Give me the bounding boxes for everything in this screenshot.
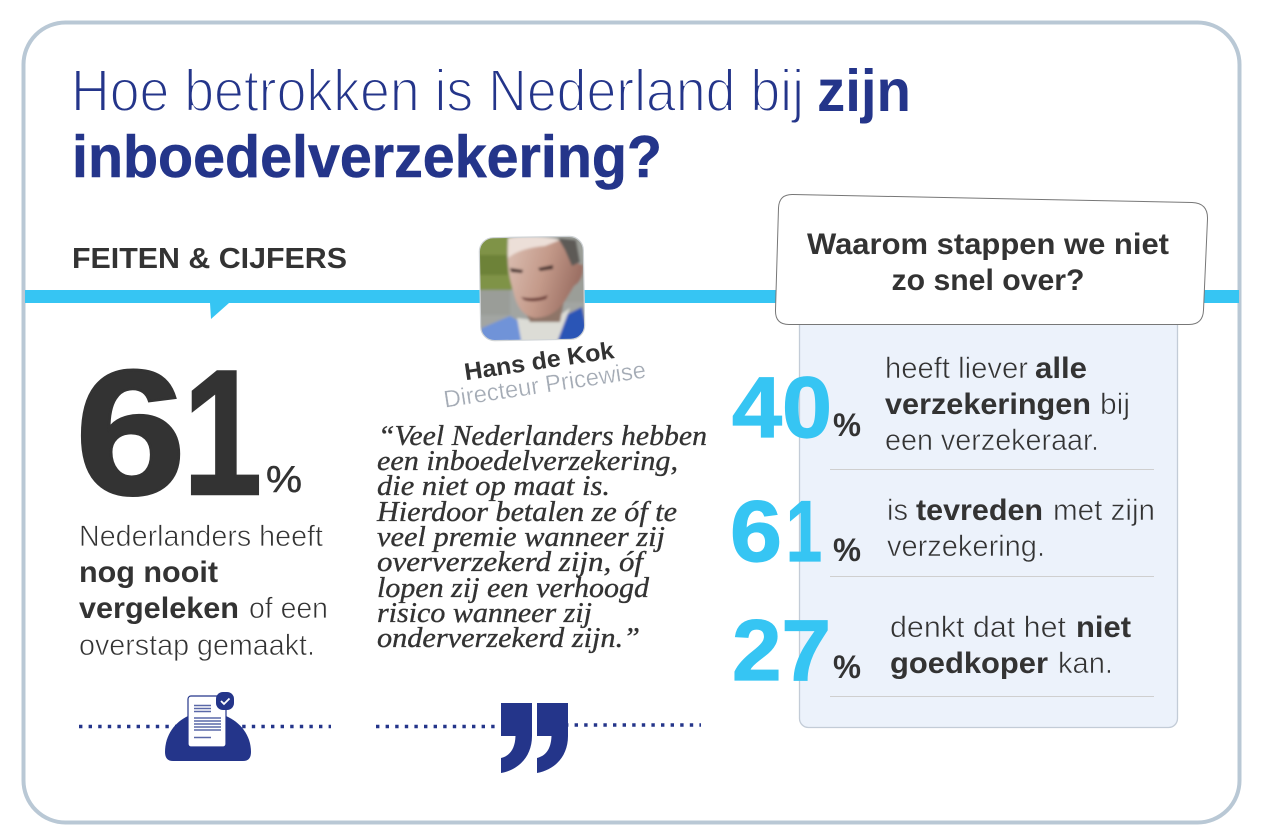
- caption: name and role: Hans de Kok: [463, 337, 617, 386]
- text block: nederlanders: Nederlanders heeft: [79, 520, 324, 553]
- callout: waarom stappen we niet: [775, 194, 1208, 324]
- stat row: 40 percent: een verzekeraar.: [885, 424, 1099, 457]
- stat row: 40 percent: 40: [732, 360, 832, 456]
- caption: name and role: [438, 333, 648, 414]
- quote text: risico wanneer zij: [377, 597, 592, 629]
- portrait photo: Hans de Kok: [478, 236, 586, 342]
- stat row: 61 percent: tevreden: [916, 494, 1043, 527]
- dotted line quote: [376, 725, 701, 726]
- callout: waarom stappen we niet: Waarom stappen we niet: [807, 228, 1169, 261]
- quote text: “Veel Nederlanders hebben: [378, 420, 707, 452]
- title: inboedelverzekering?: [72, 124, 662, 190]
- stat row: 61 percent: is: [887, 494, 908, 527]
- heading: feiten en cijfers: FEITEN & CIJFERS: [72, 243, 347, 275]
- quote text: die niet op maat is.: [377, 470, 610, 502]
- stat: 61 percent: %: [266, 459, 302, 500]
- caption: name and role: Directeur Pricewise: [442, 357, 648, 414]
- stat row: 40 percent: [732, 352, 1130, 457]
- quote text: oververzekerd zijn, óf: [377, 546, 647, 578]
- stat: 61 percent: 1: [183, 333, 262, 532]
- stat row: 27 percent: 27: [732, 603, 831, 699]
- stat row: 61 percent: met zijn: [1053, 494, 1155, 527]
- stat row: 27 percent: niet: [1076, 611, 1131, 644]
- quote text: een inboedelverzekering,: [377, 445, 678, 477]
- stat row: 27 percent: %: [833, 649, 861, 685]
- text block: nederlanders: vergeleken: [79, 592, 239, 625]
- callout: waarom stappen we niet: zo snel over?: [892, 264, 1084, 297]
- stat row: 40 percent: heeft liever: [885, 352, 1028, 385]
- stat row: 61 percent: [730, 484, 1155, 580]
- stat row: 27 percent: goedkoper: [890, 647, 1048, 680]
- dotted line left: [79, 725, 331, 728]
- title: zijn: [817, 58, 911, 124]
- title: [71, 58, 911, 190]
- stat row: 61 percent: 1: [786, 484, 822, 580]
- stat row: 40 percent: %: [833, 407, 861, 443]
- quote text: [376, 420, 707, 654]
- text block: nederlanders: [79, 520, 328, 662]
- stat row: 40 percent: bij: [1100, 388, 1130, 421]
- stat row: 27 percent: denkt dat het: [890, 611, 1067, 644]
- stat row: 27 percent: kan.: [1058, 647, 1113, 680]
- quote text: Hierdoor betalen ze óf te: [376, 496, 677, 528]
- text block: nederlanders: overstap gemaakt.: [79, 629, 315, 662]
- quote text: lopen zij een verhoogd: [377, 572, 650, 604]
- title: Hoe betrokken is Nederland bij: [71, 58, 804, 124]
- text block: nederlanders: nog nooit: [79, 556, 218, 589]
- stat row: 40 percent: verzekeringen: [885, 388, 1091, 421]
- quote text: onderverzekerd zijn.”: [377, 622, 640, 654]
- stat: 61 percent: [75, 333, 302, 532]
- cyan divider band with pointer: [25, 290, 1239, 319]
- stat row: 61 percent: 6: [730, 484, 782, 580]
- icon: document on dome: [165, 692, 251, 761]
- icon: quotation mark: [501, 703, 568, 773]
- text block: nederlanders: of een: [249, 592, 328, 625]
- quote text: veel premie wanneer zij: [377, 521, 665, 553]
- stat row: 61 percent: verzekering.: [887, 530, 1045, 563]
- stat row: 27 percent: [732, 603, 1131, 699]
- stat: 61 percent: 6: [75, 333, 186, 532]
- stat row: 40 percent: alle: [1035, 352, 1087, 385]
- stat row: 61 percent: %: [833, 532, 861, 568]
- panel: reasons: [800, 310, 1178, 728]
